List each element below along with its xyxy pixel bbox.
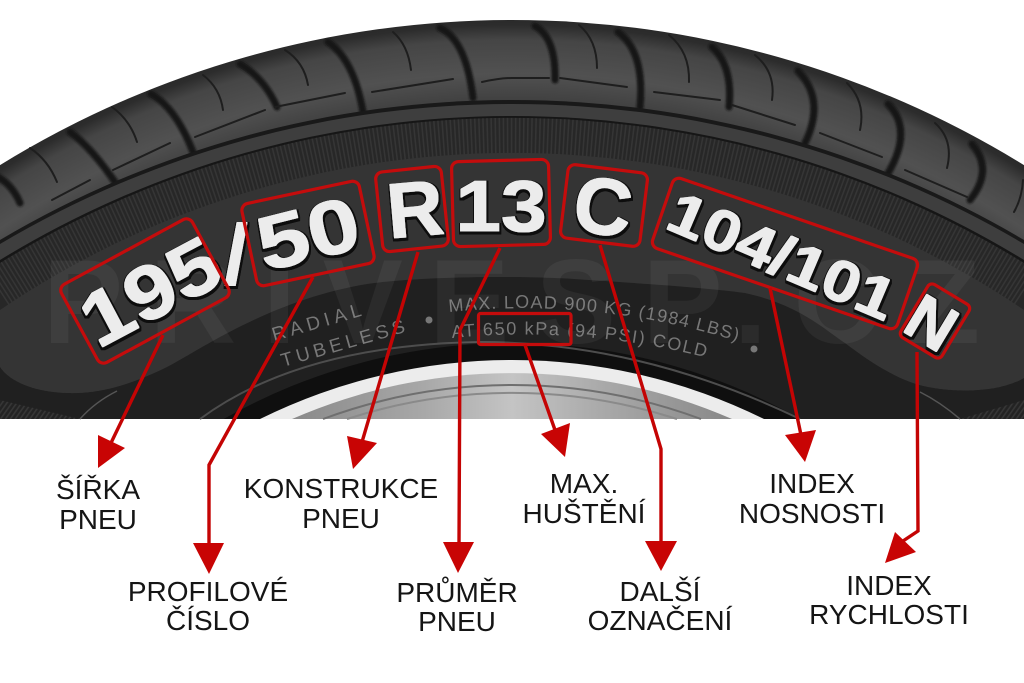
label: index nosnosti: INDEX bbox=[769, 468, 855, 499]
tire photo bbox=[0, 20, 1024, 419]
lower sidewall bbox=[0, 277, 1024, 419]
embossed dots bbox=[426, 316, 758, 352]
arrow: konstrukce pneu bbox=[347, 252, 418, 469]
box: 104/101 bbox=[651, 176, 919, 331]
box: 650 kPa bbox=[478, 314, 571, 344]
arrow: profilové číslo bbox=[193, 277, 313, 574]
label: konstrukce pneu: KONSTRUKCE bbox=[244, 473, 438, 504]
code: slash: / bbox=[224, 208, 248, 302]
arrow: další označení bbox=[600, 245, 677, 571]
embossed: radial tubeless: RADIAL bbox=[270, 300, 364, 346]
label: profilové číslo: ČÍSLO bbox=[166, 605, 250, 636]
code: N: N bbox=[893, 280, 970, 366]
box: 13 bbox=[451, 159, 551, 247]
label: max. huštění: HUŠTĚNÍ bbox=[523, 498, 646, 529]
label: další označení: DALŠÍ bbox=[620, 576, 701, 607]
label: průměr pneu: PNEU bbox=[418, 606, 496, 637]
sidewall embossed text bbox=[270, 295, 758, 372]
arrow: max. huštění bbox=[525, 345, 570, 457]
label: index nosnosti: NOSNOSTI bbox=[739, 498, 885, 529]
embossed: radial tubeless: TUBELESS bbox=[279, 316, 407, 372]
box: R bbox=[375, 166, 449, 252]
label: průměr pneu: PRŮMĚR bbox=[396, 576, 518, 608]
rib edge lines bbox=[80, 391, 960, 419]
label: šířka pneu: PNEU bbox=[59, 504, 137, 535]
shoulder band bbox=[0, 100, 1024, 419]
code: 195: 195 bbox=[66, 220, 235, 364]
tread band bbox=[0, 20, 1024, 419]
ribbed band bbox=[0, 118, 1024, 419]
box: 50 bbox=[241, 180, 375, 287]
bead line bbox=[200, 342, 800, 419]
red highlight boxes bbox=[58, 159, 972, 366]
watermark: PRIVESP.CZ bbox=[43, 235, 980, 369]
label: profilové číslo: PROFILOVÉ bbox=[128, 576, 288, 607]
arrow: index nosnosti bbox=[770, 288, 816, 462]
upper sidewall bbox=[0, 153, 1024, 393]
code: C: C bbox=[568, 158, 638, 255]
box: N bbox=[898, 282, 972, 360]
code: R: R bbox=[383, 163, 447, 255]
code: 13: 13 bbox=[455, 167, 547, 247]
label: index rychlosti: INDEX bbox=[846, 570, 932, 601]
label: index rychlosti: RYCHLOSTI bbox=[809, 599, 969, 630]
label: další označení: OZNAČENÍ bbox=[588, 605, 733, 636]
rim shadow bbox=[224, 343, 800, 419]
rim bbox=[260, 360, 764, 419]
embossed: pressure: AT 650 kPa (94 PSI) COLD bbox=[452, 322, 706, 356]
arrow: šířka pneu bbox=[98, 335, 163, 468]
tire code numbers bbox=[66, 158, 970, 366]
arrow: index rychlosti bbox=[885, 352, 918, 563]
embossed path guides bbox=[449, 308, 740, 342]
embossed: load: MAX. LOAD 900 KG (1984 LBS) bbox=[449, 295, 738, 344]
tread grooves bbox=[0, 26, 983, 203]
code: 104/101: 104/101 bbox=[658, 179, 905, 333]
lower ribbed corners bbox=[0, 360, 1024, 419]
code: 50: 50 bbox=[248, 180, 368, 287]
label: šířka pneu: ŠÍŘKA bbox=[56, 474, 140, 505]
arrow: průměr pneu bbox=[443, 248, 500, 573]
label: konstrukce pneu: PNEU bbox=[302, 503, 380, 534]
label: max. huštění: MAX. bbox=[550, 468, 618, 499]
tread sipes bbox=[30, 25, 1023, 212]
box: C bbox=[560, 164, 648, 247]
box: 195 bbox=[58, 216, 232, 366]
